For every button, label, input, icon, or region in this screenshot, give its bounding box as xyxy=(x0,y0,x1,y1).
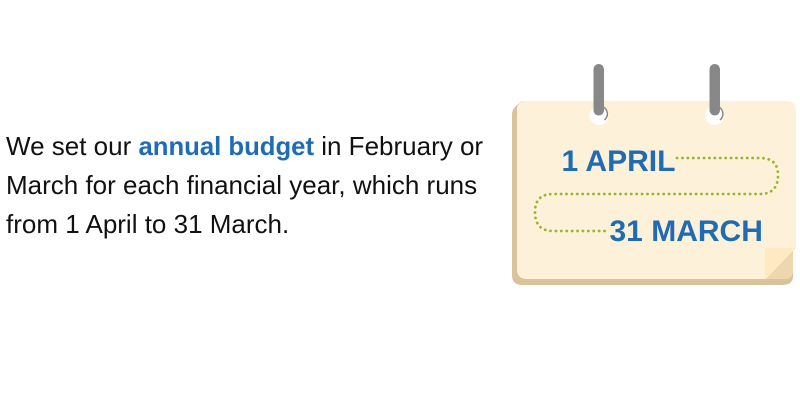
folded corner xyxy=(765,248,795,279)
right binding ring xyxy=(705,64,724,125)
left binding ring xyxy=(590,64,608,125)
calendar page xyxy=(517,101,796,279)
text block: budget description: March for each financial year, which runs xyxy=(6,170,477,200)
start date label: 1 APRIL xyxy=(562,145,675,178)
calendar page back shadow xyxy=(512,101,793,285)
text block: budget description: from 1 April to 31 March. xyxy=(6,209,289,239)
text block: budget description: We set our annual budget in February or xyxy=(6,131,483,161)
end date label: 31 MARCH xyxy=(610,215,763,248)
text block: budget description xyxy=(6,131,483,239)
dotted connector line xyxy=(535,158,778,231)
